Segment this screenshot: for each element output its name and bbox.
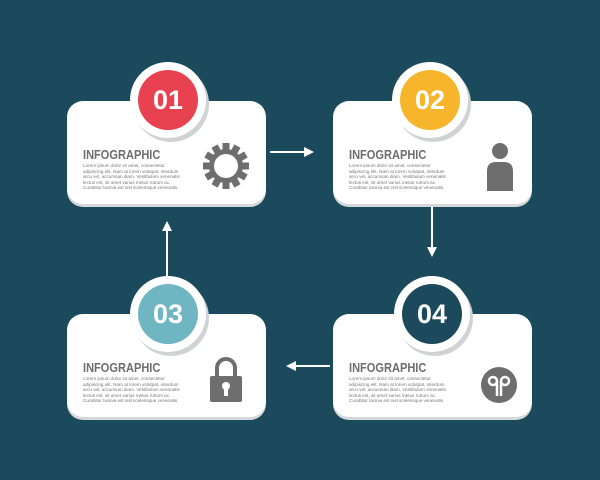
heading 1: INFOGRAPHIC — [83, 147, 160, 162]
card 2 — [333, 101, 532, 204]
arrow 2 to 4 — [427, 206, 437, 257]
badge 04: 04 — [417, 299, 447, 329]
card 1 — [67, 101, 266, 204]
icon: lock — [210, 357, 242, 402]
text 1: Lorem ipsum dolor sit amet, consectetur adipiscing elit. Nam at lorem volutpat, interdum arcu vel, accumsan diam. Vestibulum venenatis lectus est, sit amet varius metus rutrum ac. Curabitur lacinia est nisl scelerisque venenatis. — [83, 163, 180, 190]
heading 3: INFOGRAPHIC — [83, 360, 160, 375]
badge 01 — [130, 62, 206, 138]
arrow 4 to 3 — [286, 361, 330, 371]
badge 04 — [394, 276, 470, 352]
heading 2: INFOGRAPHIC — [349, 147, 426, 162]
arrow 1 to 2 — [270, 147, 314, 157]
badge 02: 02 — [415, 85, 445, 115]
arrow 3 to 1 — [162, 221, 172, 276]
card 4 — [333, 314, 532, 417]
icon: gear — [203, 143, 249, 189]
icon: circle emblem — [481, 367, 517, 403]
icon: person — [487, 143, 513, 191]
card 3 — [67, 314, 266, 417]
badge 02 — [392, 62, 468, 138]
text 2: Lorem ipsum dolor sit amet, consectetur adipiscing elit. Nam at lorem volutpat, interdum arcu vel, accumsan diam. Vestibulum venenatis lectus est, sit amet varius metus rutrum ac. Curabitur lacinia est nisl scelerisque venenatis. — [349, 163, 446, 190]
heading 4: INFOGRAPHIC — [349, 360, 426, 375]
text 3: Lorem ipsum dolor sit amet, consectetur adipiscing elit. Nam at lorem volutpat, interdum arcu vel, accumsan diam. Vestibulum venenatis lectus est, sit amet varius metus rutrum ac. Curabitur lacinia est nisl scelerisque venenatis. — [83, 376, 180, 403]
badge 03: 03 — [153, 299, 183, 329]
badge 01: 01 — [153, 85, 183, 115]
text 4: Lorem ipsum dolor sit amet, consectetur adipiscing elit. Nam at lorem volutpat, interdum arcu vel, accumsan diam. Vestibulum venenatis lectus est, sit amet varius metus rutrum ac. Curabitur lacinia est nisl scelerisque venenatis. — [349, 376, 446, 403]
badge 03 — [130, 276, 206, 352]
